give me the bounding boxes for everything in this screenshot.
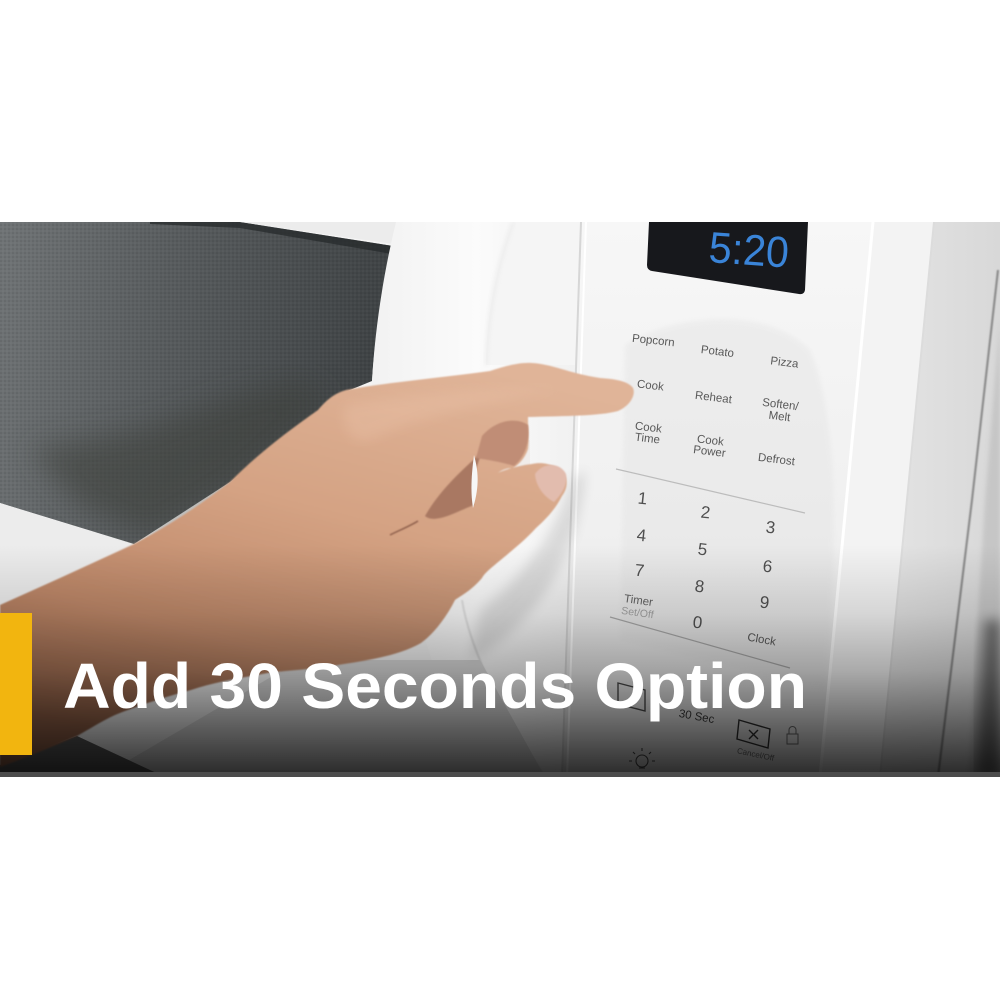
- timer and clock labels: Clock: [746, 632, 777, 648]
- function key labels: Cook: [636, 378, 665, 394]
- display: [647, 222, 808, 294]
- function key labels: Reheat: [694, 390, 733, 406]
- control panel: [562, 222, 836, 768]
- number keys: 1: [637, 489, 648, 508]
- timer and clock labels: Timer: [623, 593, 654, 609]
- number keys: [634, 489, 776, 632]
- function key labels: Potato: [700, 344, 735, 360]
- number keys: 4: [636, 526, 647, 545]
- upper keypad divider: [616, 469, 805, 513]
- hollow between fingers: [517, 440, 530, 466]
- display time: 5:20: [707, 223, 791, 277]
- palm crease line: [390, 521, 418, 535]
- lock icon: [787, 727, 798, 744]
- cancel label: Cancel/Off: [736, 746, 776, 763]
- microwave body base: [44, 226, 430, 658]
- function key labels: Cook: [696, 433, 725, 449]
- number keys: 9: [759, 593, 770, 612]
- number keys: 7: [634, 561, 645, 580]
- timer and clock labels: [620, 593, 777, 648]
- back of hand and arm: [0, 363, 634, 767]
- function key labels: Soften/: [762, 397, 800, 413]
- top frame strip above window: [240, 222, 258, 225]
- lower ledge of microwave: [0, 503, 28, 512]
- reflection on keypad: [620, 319, 834, 690]
- function key labels: Popcorn: [631, 333, 675, 349]
- microwave window mesh: [0, 222, 393, 544]
- function key labels: [631, 333, 800, 468]
- add 30 seconds label: 30 Sec: [678, 708, 715, 726]
- function key labels: Cook: [634, 420, 663, 436]
- number keys: 5: [697, 540, 708, 559]
- knuckle highlight: [350, 406, 424, 434]
- curled middle finger: [476, 421, 529, 466]
- lower keypad divider: [610, 617, 790, 668]
- dark gradient overlay: [0, 545, 1000, 773]
- door handle: [0, 223, 528, 772]
- function key labels: Melt: [768, 410, 792, 424]
- function key labels: Pizza: [770, 355, 800, 371]
- number keys: 0: [692, 613, 703, 632]
- hand pressing the cook key: [0, 363, 634, 767]
- number keys: 6: [762, 557, 773, 576]
- shaded palm crease: [425, 452, 482, 519]
- start button icon: [618, 683, 645, 711]
- timer and clock labels: Set/Off: [620, 605, 654, 621]
- cancel button icon: [737, 720, 770, 748]
- infographic canvas: [0, 222, 1000, 777]
- title: Add 30 Seconds Option: [63, 650, 807, 722]
- yellow accent bar: [0, 613, 32, 755]
- number keys: 8: [694, 577, 705, 596]
- function key labels: Defrost: [757, 452, 796, 468]
- number keys: 3: [765, 518, 776, 537]
- bottom edge band: [0, 772, 1000, 777]
- white door sliver between fingers: [471, 455, 478, 508]
- thumb nail: [535, 465, 566, 502]
- side trim of microwave: [820, 222, 1000, 777]
- function key labels: Time: [634, 432, 661, 447]
- function key labels: Power: [692, 444, 726, 460]
- number keys: 2: [700, 503, 711, 522]
- hand shadow on door: [470, 470, 585, 660]
- photo: microwave with hand pressing keypad: [0, 222, 1000, 777]
- light bulb icon: [629, 748, 655, 768]
